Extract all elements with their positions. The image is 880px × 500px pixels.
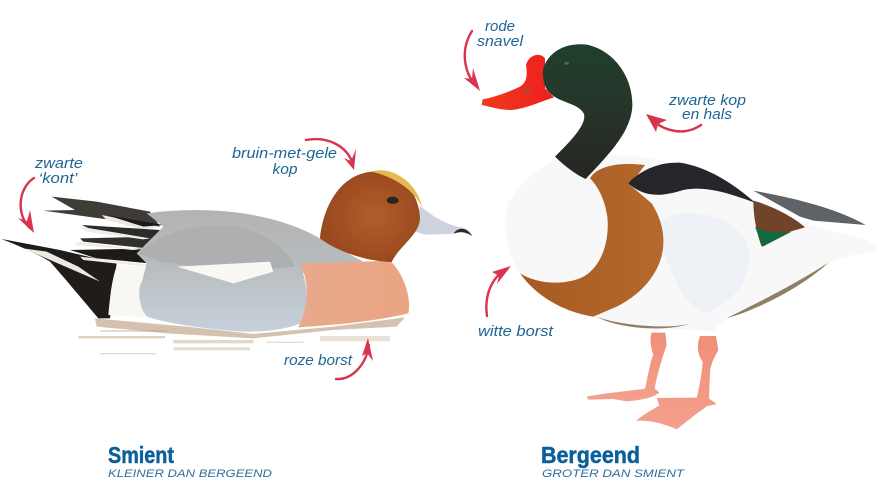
title block: bergeend: GROTER DAN SMIENT bbox=[542, 468, 686, 480]
belly shadow bbox=[597, 263, 828, 328]
arrow: witte borst bbox=[486, 266, 511, 316]
title block: smient bbox=[108, 442, 272, 480]
chestnut breast band bbox=[520, 164, 663, 317]
upper body and wing bbox=[137, 210, 363, 290]
arrow: roze borst bbox=[336, 338, 373, 379]
arrow: bruin-met-gele kop bbox=[306, 139, 356, 170]
label: rode snavel: rode bbox=[485, 18, 515, 35]
illustration: bergeend (shelduck) bbox=[482, 44, 877, 332]
bill bbox=[415, 206, 472, 236]
front leg bbox=[636, 336, 718, 429]
label: zwarte 'kont' bbox=[34, 155, 83, 187]
wing detail bbox=[138, 225, 295, 272]
white flank patch bbox=[108, 266, 148, 317]
brown speculum bbox=[753, 201, 805, 247]
label: zwarte 'kont': ‘kont’ bbox=[38, 170, 78, 187]
white body bbox=[505, 155, 877, 332]
label: zwarte kop en hals: zwarte kop bbox=[668, 92, 746, 109]
arrow: zwarte kont bbox=[18, 178, 34, 233]
illustration: bergeend legs bbox=[587, 333, 718, 429]
label: witte borst: witte borst bbox=[478, 323, 554, 340]
label: zwarte 'kont': zwarte bbox=[34, 155, 83, 172]
water reflection bbox=[78, 317, 405, 354]
black wing bbox=[628, 163, 755, 203]
head and neck bbox=[543, 44, 632, 179]
white wing patch bbox=[177, 262, 273, 283]
head bbox=[320, 171, 420, 262]
label: roze borst: roze borst bbox=[284, 352, 353, 369]
tail feathers bbox=[2, 197, 163, 318]
back leg bbox=[587, 333, 667, 401]
title block: bergeend bbox=[541, 442, 686, 480]
yellow crown bbox=[371, 170, 422, 207]
arrow: rode snavel bbox=[464, 31, 480, 91]
title block: smient: KLEINER DAN BERGEEND bbox=[108, 468, 272, 480]
label: bruin-met-gele kop bbox=[232, 145, 337, 178]
label: zwarte kop en hals bbox=[668, 92, 746, 123]
title block: smient: Smient bbox=[108, 442, 174, 468]
label: bruin-met-gele kop: kop bbox=[272, 161, 298, 178]
blue-white shading bbox=[657, 213, 749, 313]
green speculum bbox=[755, 227, 792, 247]
label: zwarte kop en hals: en hals bbox=[682, 106, 733, 123]
eye bbox=[387, 197, 399, 204]
label: rode snavel bbox=[477, 18, 524, 50]
label: rode snavel: snavel bbox=[477, 33, 524, 50]
eye bbox=[564, 62, 569, 65]
red bill bbox=[482, 55, 554, 110]
title block: bergeend: Bergeend bbox=[541, 442, 640, 468]
gray tail bbox=[753, 191, 866, 225]
label: bruin-met-gele kop: bruin-met-gele bbox=[232, 145, 337, 162]
lower flank bbox=[139, 263, 307, 332]
nostril bbox=[522, 87, 532, 94]
pink breast bbox=[298, 261, 409, 327]
illustration: smient (wigeon) bbox=[2, 170, 472, 354]
arrow: zwarte kop en hals bbox=[646, 114, 701, 132]
